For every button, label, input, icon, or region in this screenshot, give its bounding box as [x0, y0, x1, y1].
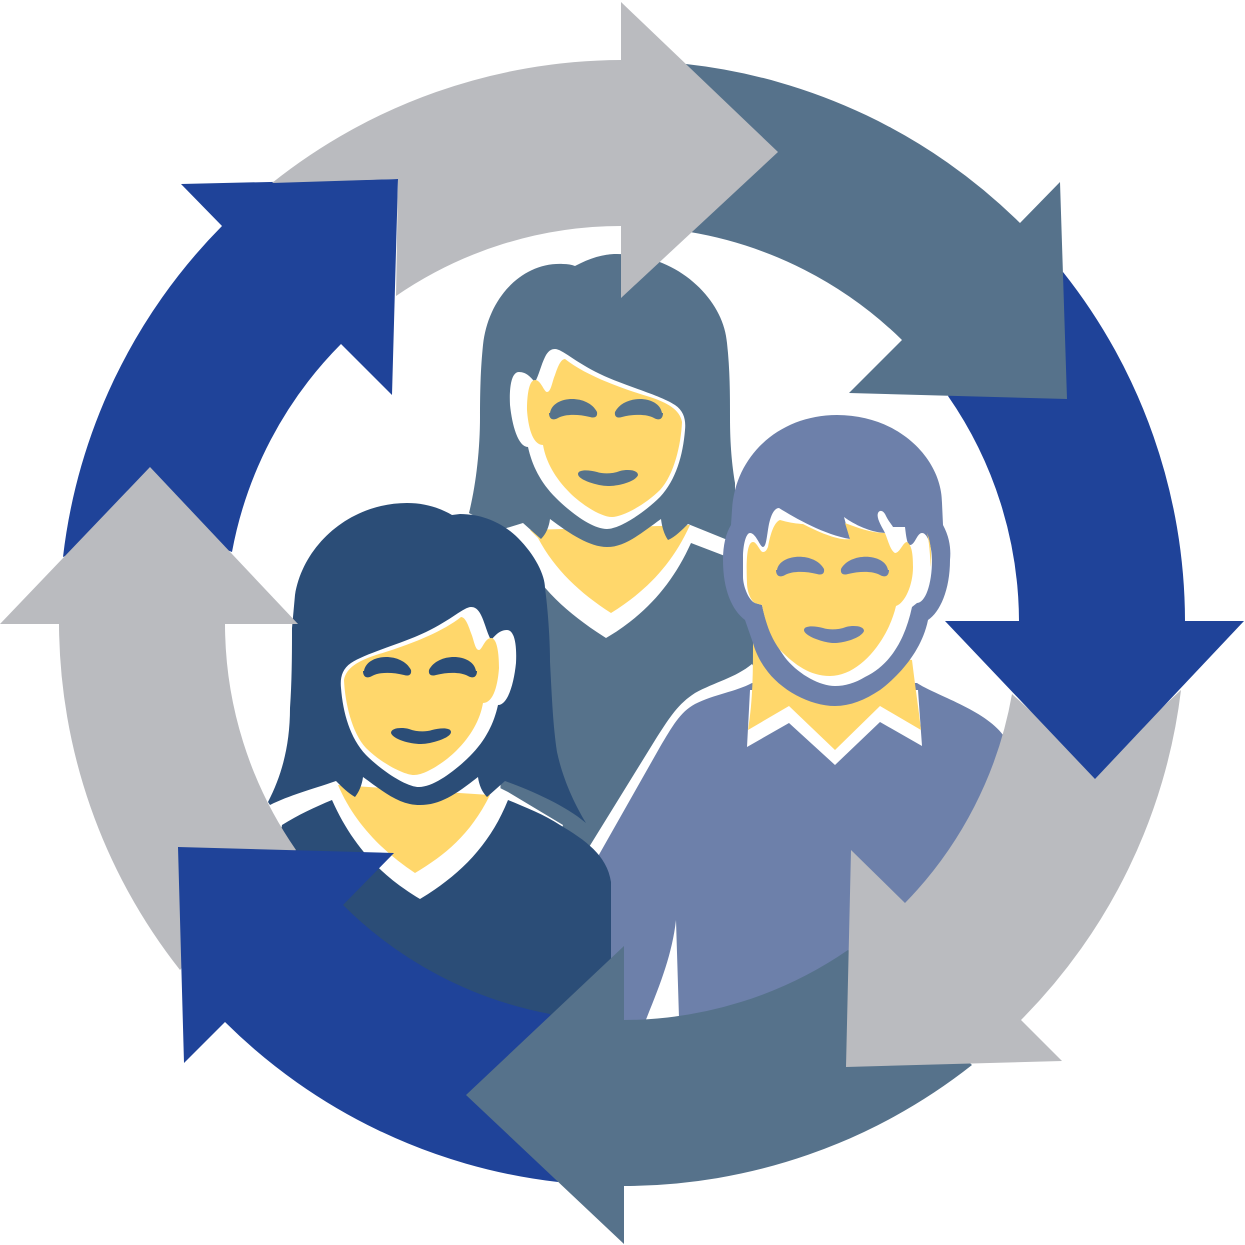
arrow: gray bottom right [846, 690, 1181, 1067]
face outline [341, 607, 516, 787]
back woman collar [506, 523, 725, 638]
face outline [743, 508, 932, 686]
mouth [578, 470, 638, 486]
man head and hair [723, 415, 950, 706]
front woman hair [268, 503, 586, 823]
front woman body [270, 800, 611, 1060]
arrow: blue top left [63, 179, 398, 557]
left eye [363, 657, 411, 677]
face skin [747, 520, 913, 676]
back woman face [510, 349, 685, 529]
person: back woman [469, 254, 765, 852]
right eye [429, 657, 477, 677]
man shirt gap [645, 920, 679, 1022]
right eye [615, 399, 663, 419]
face skin [527, 359, 682, 517]
arrow: gray top [272, 2, 778, 298]
person: man [586, 415, 1040, 1060]
man neck [748, 640, 921, 750]
arrow: slate bottom [466, 946, 972, 1244]
left eye [776, 557, 824, 576]
arrow: gray left [0, 467, 298, 970]
man shoulder outline [586, 664, 770, 880]
person: front woman [268, 503, 611, 1060]
back woman body [500, 532, 765, 852]
face skin [344, 617, 499, 775]
face outline [510, 349, 685, 529]
left eye [549, 399, 597, 419]
man body [596, 683, 1040, 1060]
front woman neck [338, 785, 490, 873]
back woman neck [530, 525, 690, 613]
ear highlight [927, 533, 931, 567]
front woman collar and shoulder [270, 781, 563, 905]
mouth [804, 626, 864, 643]
arrow: blue right [945, 272, 1244, 779]
man collar [747, 690, 922, 765]
right eye [841, 557, 889, 576]
man face [743, 508, 932, 686]
back woman hair [469, 254, 735, 547]
arrow: slate top right [686, 64, 1067, 399]
front woman face [341, 607, 516, 787]
arrow: blue bottom left [178, 847, 580, 1182]
mouth [391, 728, 451, 744]
